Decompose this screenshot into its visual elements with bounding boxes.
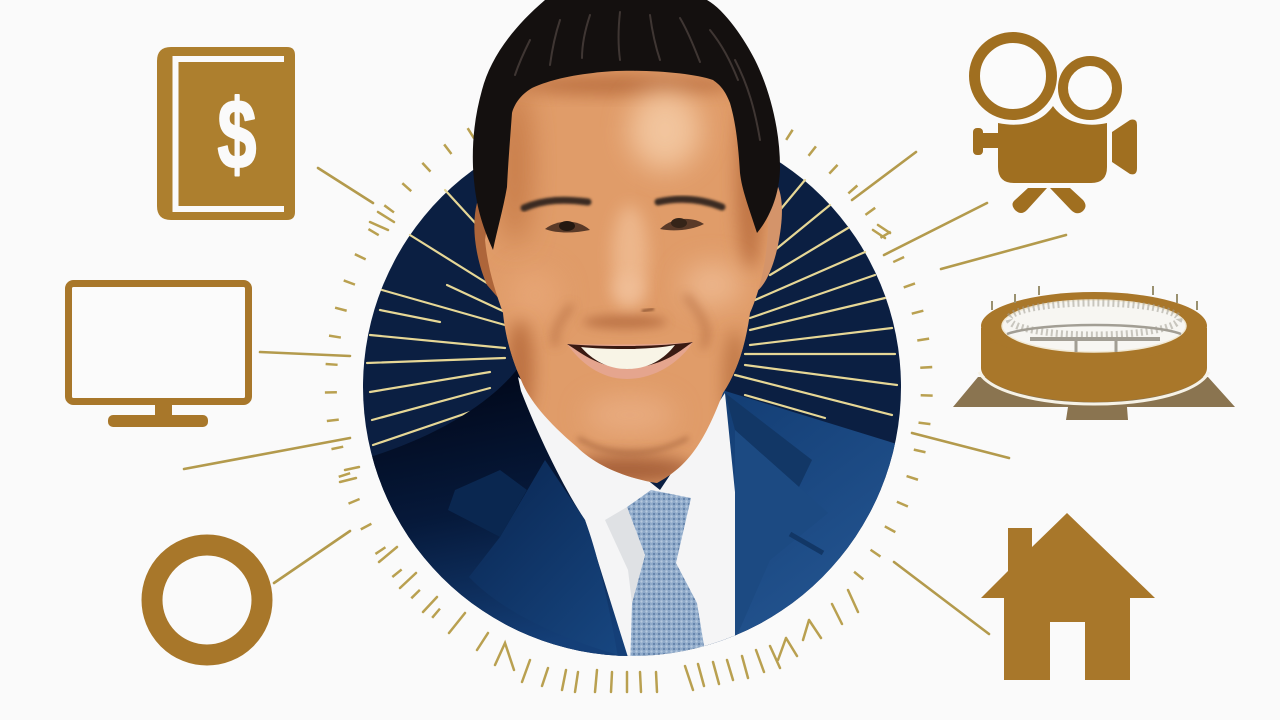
right lapel dark patch <box>725 393 812 487</box>
hair <box>473 0 780 250</box>
radial tick ring <box>331 88 927 692</box>
collar shadow beside tie <box>605 507 645 603</box>
white shirt <box>518 377 737 670</box>
mouth <box>567 342 693 379</box>
clothing clipped to the disc <box>360 368 900 670</box>
left upper lapel <box>448 470 527 537</box>
nose <box>583 274 667 329</box>
left lapel <box>470 460 622 656</box>
chin crease <box>578 438 688 453</box>
icon: house <box>981 513 1155 680</box>
right lapel lower <box>735 430 764 636</box>
smile creases <box>555 295 707 348</box>
inner sunburst rays <box>367 180 897 445</box>
pocket slit <box>790 534 823 553</box>
face <box>485 64 768 483</box>
icon: film camera <box>973 38 1137 213</box>
eyes <box>545 218 704 232</box>
icon: stadium <box>953 286 1235 420</box>
hair strands <box>515 12 760 140</box>
navy circle background <box>363 118 901 656</box>
left ear <box>474 203 510 300</box>
icon: book with dollar sign <box>157 47 295 220</box>
eyebrows <box>524 199 722 208</box>
suit jacket right <box>702 390 895 647</box>
face shading <box>499 75 764 484</box>
long gold spoke lines <box>184 152 1066 634</box>
icon: ring <box>152 545 262 655</box>
portrait medallion <box>360 0 901 670</box>
suit jacket left <box>372 370 628 656</box>
right ear <box>745 177 782 292</box>
necktie <box>627 490 704 656</box>
icon: monitor <box>68 284 248 427</box>
head <box>473 0 782 484</box>
dollar sign: $ <box>218 81 256 190</box>
